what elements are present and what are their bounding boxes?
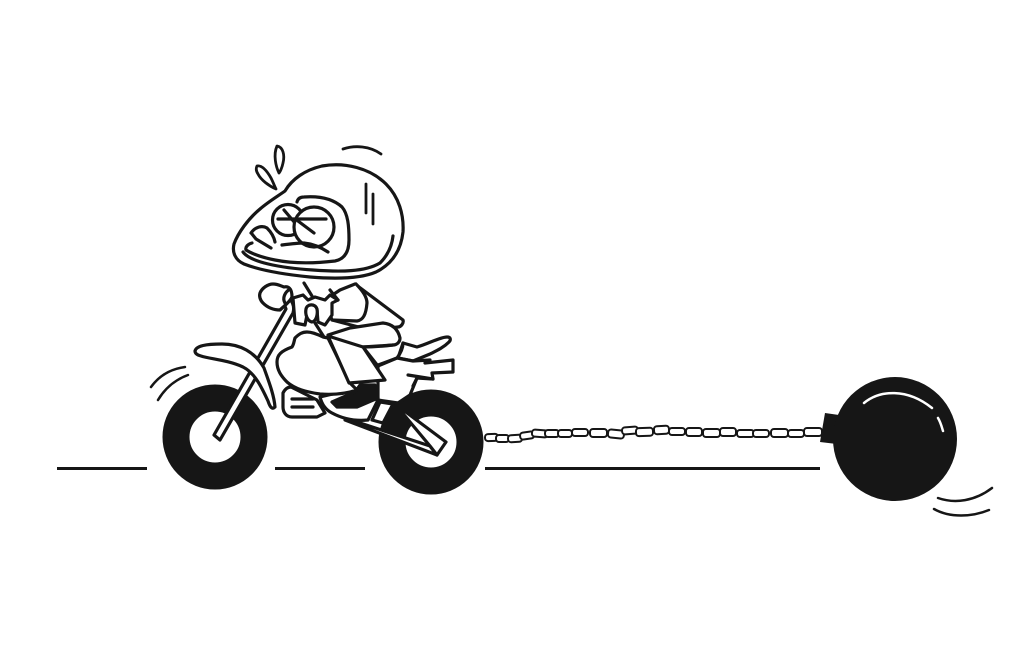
- rider thigh: [328, 323, 400, 366]
- rider trouser leg: [328, 336, 385, 383]
- visor: [246, 197, 349, 263]
- boot: [332, 385, 378, 407]
- ground lines: [57, 467, 820, 470]
- front fender: [195, 344, 275, 408]
- right eye: [278, 207, 334, 247]
- ball motion lines: [934, 488, 992, 516]
- rider cuff and hand: [293, 295, 338, 337]
- engine cover: [320, 390, 378, 420]
- footrest block: [283, 387, 325, 417]
- lips: [251, 227, 275, 248]
- helmet motion line: [343, 147, 381, 154]
- sweat drops: [256, 146, 284, 189]
- rear seat and tail: [378, 337, 453, 403]
- rear wheel: [392, 403, 470, 481]
- left eye: [272, 204, 304, 236]
- fuel tank: [277, 332, 357, 394]
- mouth line: [282, 243, 328, 252]
- rider sleeve: [332, 284, 367, 321]
- rider torso: [325, 284, 403, 330]
- glove thumb and grip: [284, 289, 290, 303]
- rider collar: [304, 283, 338, 300]
- rear butt contour: [378, 343, 403, 365]
- front motion lines: [151, 367, 188, 400]
- helmet: [233, 165, 403, 278]
- chain: [485, 426, 822, 442]
- front fork: [214, 297, 294, 440]
- rider glove: [260, 284, 292, 310]
- wrecking ball: [820, 377, 957, 501]
- rear swing arm and frame: [345, 402, 446, 455]
- front wheel: [176, 398, 254, 476]
